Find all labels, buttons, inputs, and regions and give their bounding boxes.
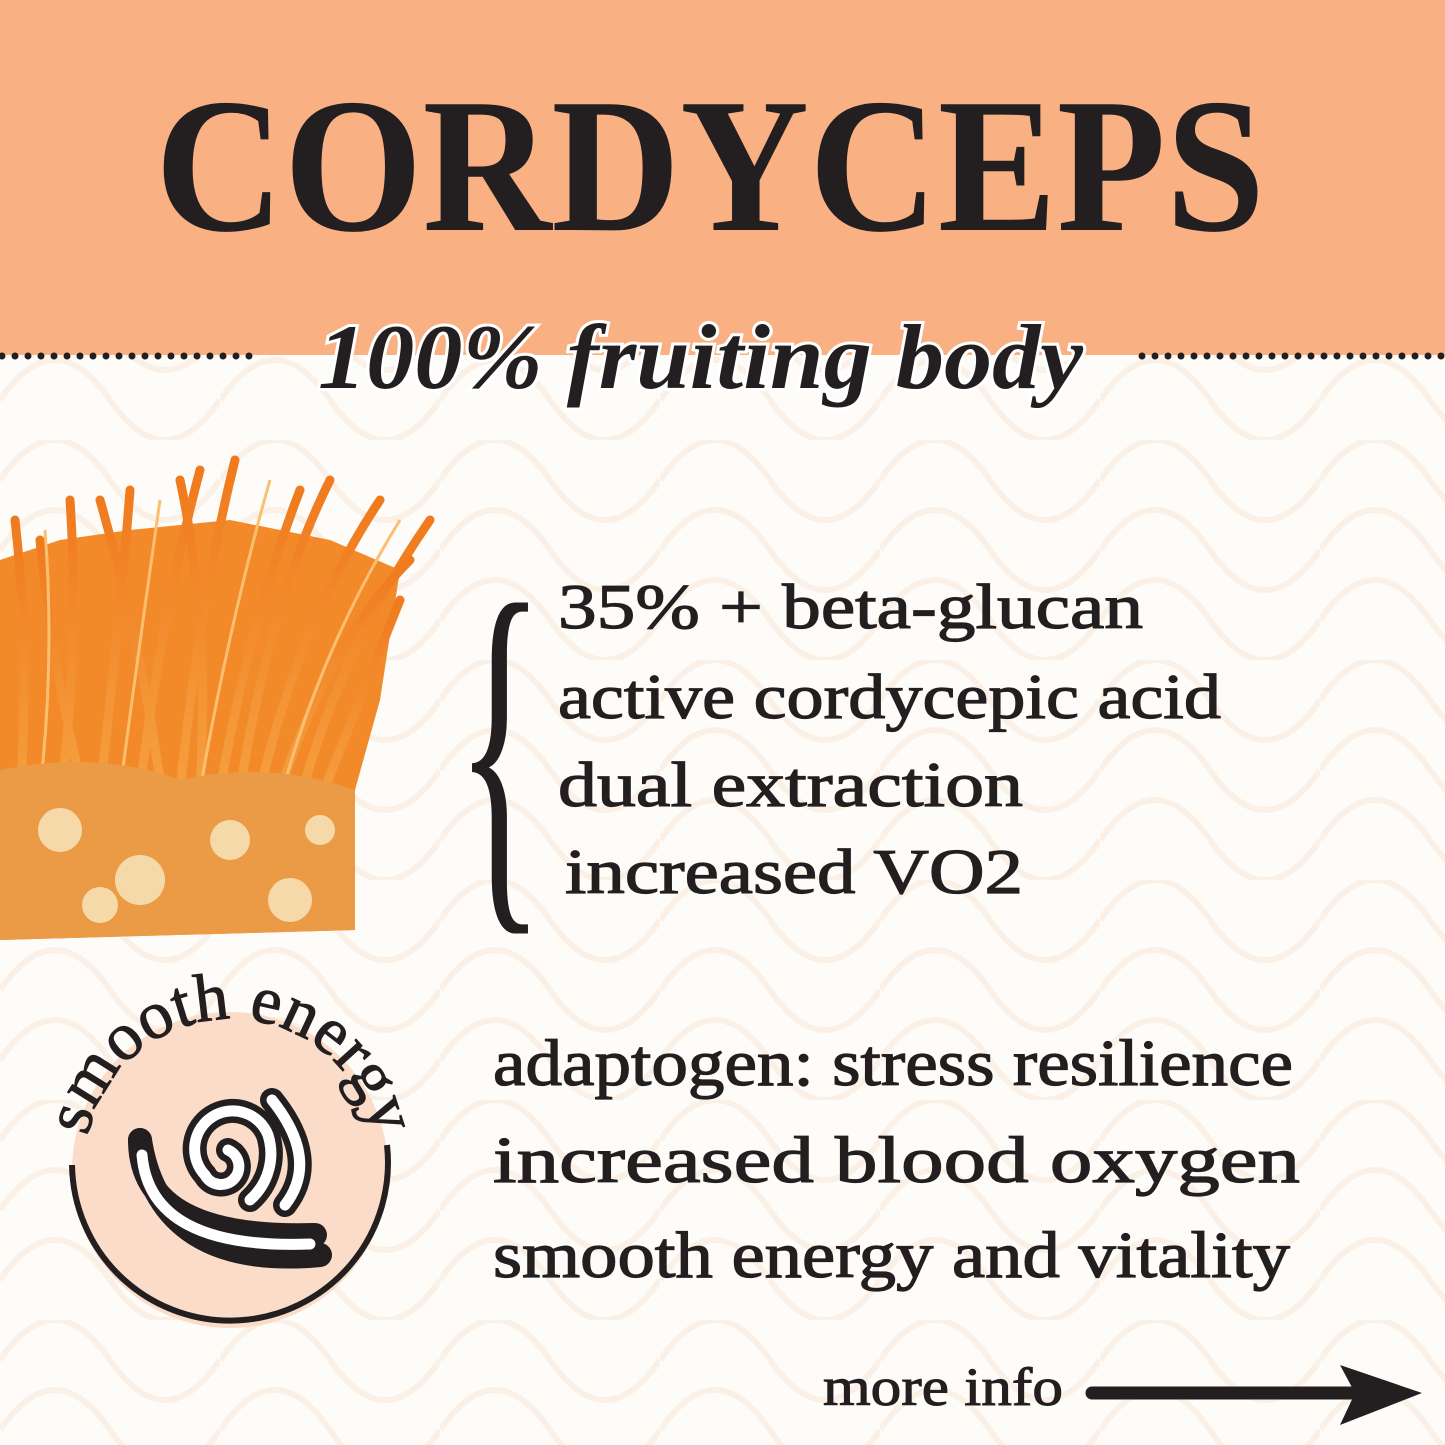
emblem: smooth energy: smooth energy: [59, 973, 406, 1134]
features list: [558, 571, 1221, 907]
benefits list: [493, 1027, 1300, 1292]
features list: active cordycepic acid: [558, 661, 1221, 732]
arrow: [1092, 1365, 1422, 1425]
title: CORDYCEPS: [155, 59, 1265, 272]
header band: [0, 0, 1445, 355]
text: {: [455, 524, 545, 967]
features list: increased VO2: [565, 836, 1023, 907]
mushroom image: [0, 460, 430, 940]
benefits list: increased blood oxygen: [493, 1124, 1300, 1197]
more info link: more info: [823, 1357, 1063, 1417]
features list: dual extraction: [558, 749, 1023, 820]
features list: 35% + beta-glucan: [558, 571, 1143, 642]
benefits list: smooth energy and vitality: [493, 1219, 1290, 1292]
subtitle script: 100% fruiting body: [318, 306, 1084, 408]
benefits list: adaptogen: stress resilience: [493, 1027, 1293, 1100]
emblem: smooth energy: [59, 973, 406, 1328]
